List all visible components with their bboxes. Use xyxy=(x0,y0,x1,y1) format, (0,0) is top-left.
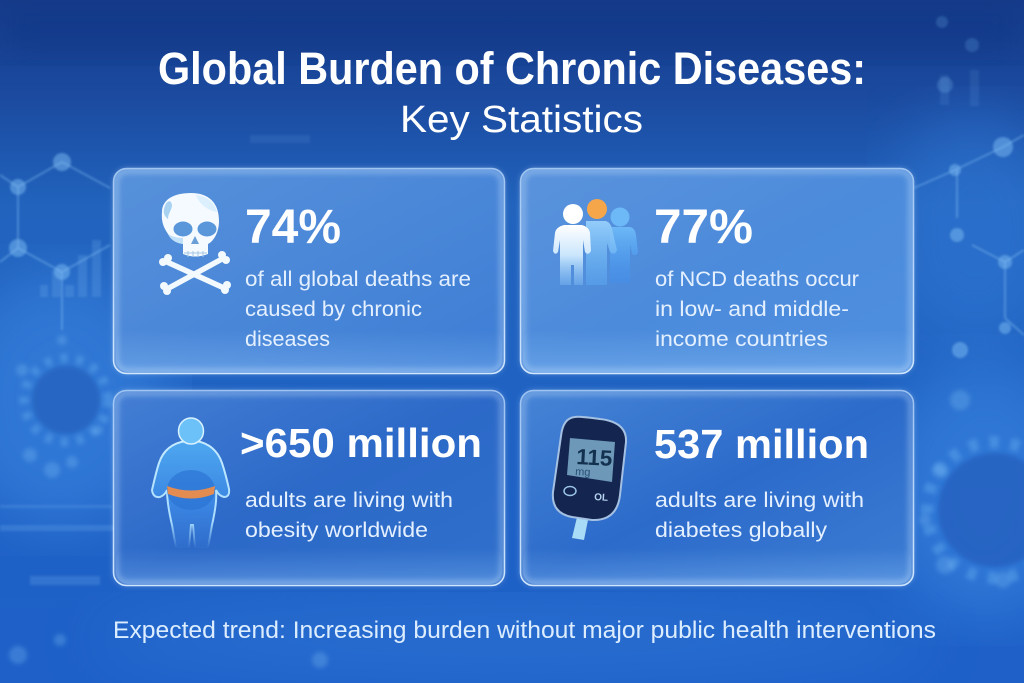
description: diabetes: adults are living with xyxy=(655,488,864,512)
stat: 537 million: 537 million xyxy=(654,421,869,467)
description: diabetes xyxy=(655,488,864,542)
panel: obesity xyxy=(114,390,504,586)
description: obesity xyxy=(245,488,453,542)
icon: skull and crossbones xyxy=(159,193,231,295)
description: global deaths: diseases xyxy=(245,327,330,351)
icon: glucose meter: 115 xyxy=(576,444,613,471)
description: NCD deaths: in low- and middle- xyxy=(655,297,849,321)
description: NCD deaths: income countries xyxy=(655,327,828,351)
title: Global Burden of Chronic Diseases: xyxy=(158,43,866,94)
title: Key Statistics xyxy=(400,99,643,141)
description: obesity: obesity worldwide xyxy=(245,518,428,542)
panel: diabetes xyxy=(520,390,914,586)
icon: obese figure with belt xyxy=(152,418,229,548)
description: global deaths: caused by chronic xyxy=(245,297,422,321)
icon: glucose meter: OL xyxy=(594,492,608,504)
title xyxy=(158,43,866,141)
panel: 77% of NCD deaths xyxy=(520,168,914,374)
description: global deaths: of all global deaths are xyxy=(245,267,471,291)
description: global deaths xyxy=(245,267,471,351)
description: diabetes: diabetes globally xyxy=(655,518,827,542)
panel: 74% of global deaths xyxy=(114,168,504,374)
description: NCD deaths: of NCD deaths occur xyxy=(655,267,859,291)
icon: group of people xyxy=(553,199,638,285)
footer: expected trend: Expected trend: Increasing burden without major public health interventions xyxy=(113,617,936,644)
icon: glucose meter xyxy=(553,417,626,540)
stat: 74%: 74% xyxy=(245,201,341,254)
stat: >650 million: >650 million xyxy=(240,420,482,466)
description: obesity: adults are living with xyxy=(245,488,453,512)
description: NCD deaths xyxy=(655,267,859,351)
icon: glucose meter: mg xyxy=(575,466,591,479)
stat: 77%: 77% xyxy=(654,201,753,254)
